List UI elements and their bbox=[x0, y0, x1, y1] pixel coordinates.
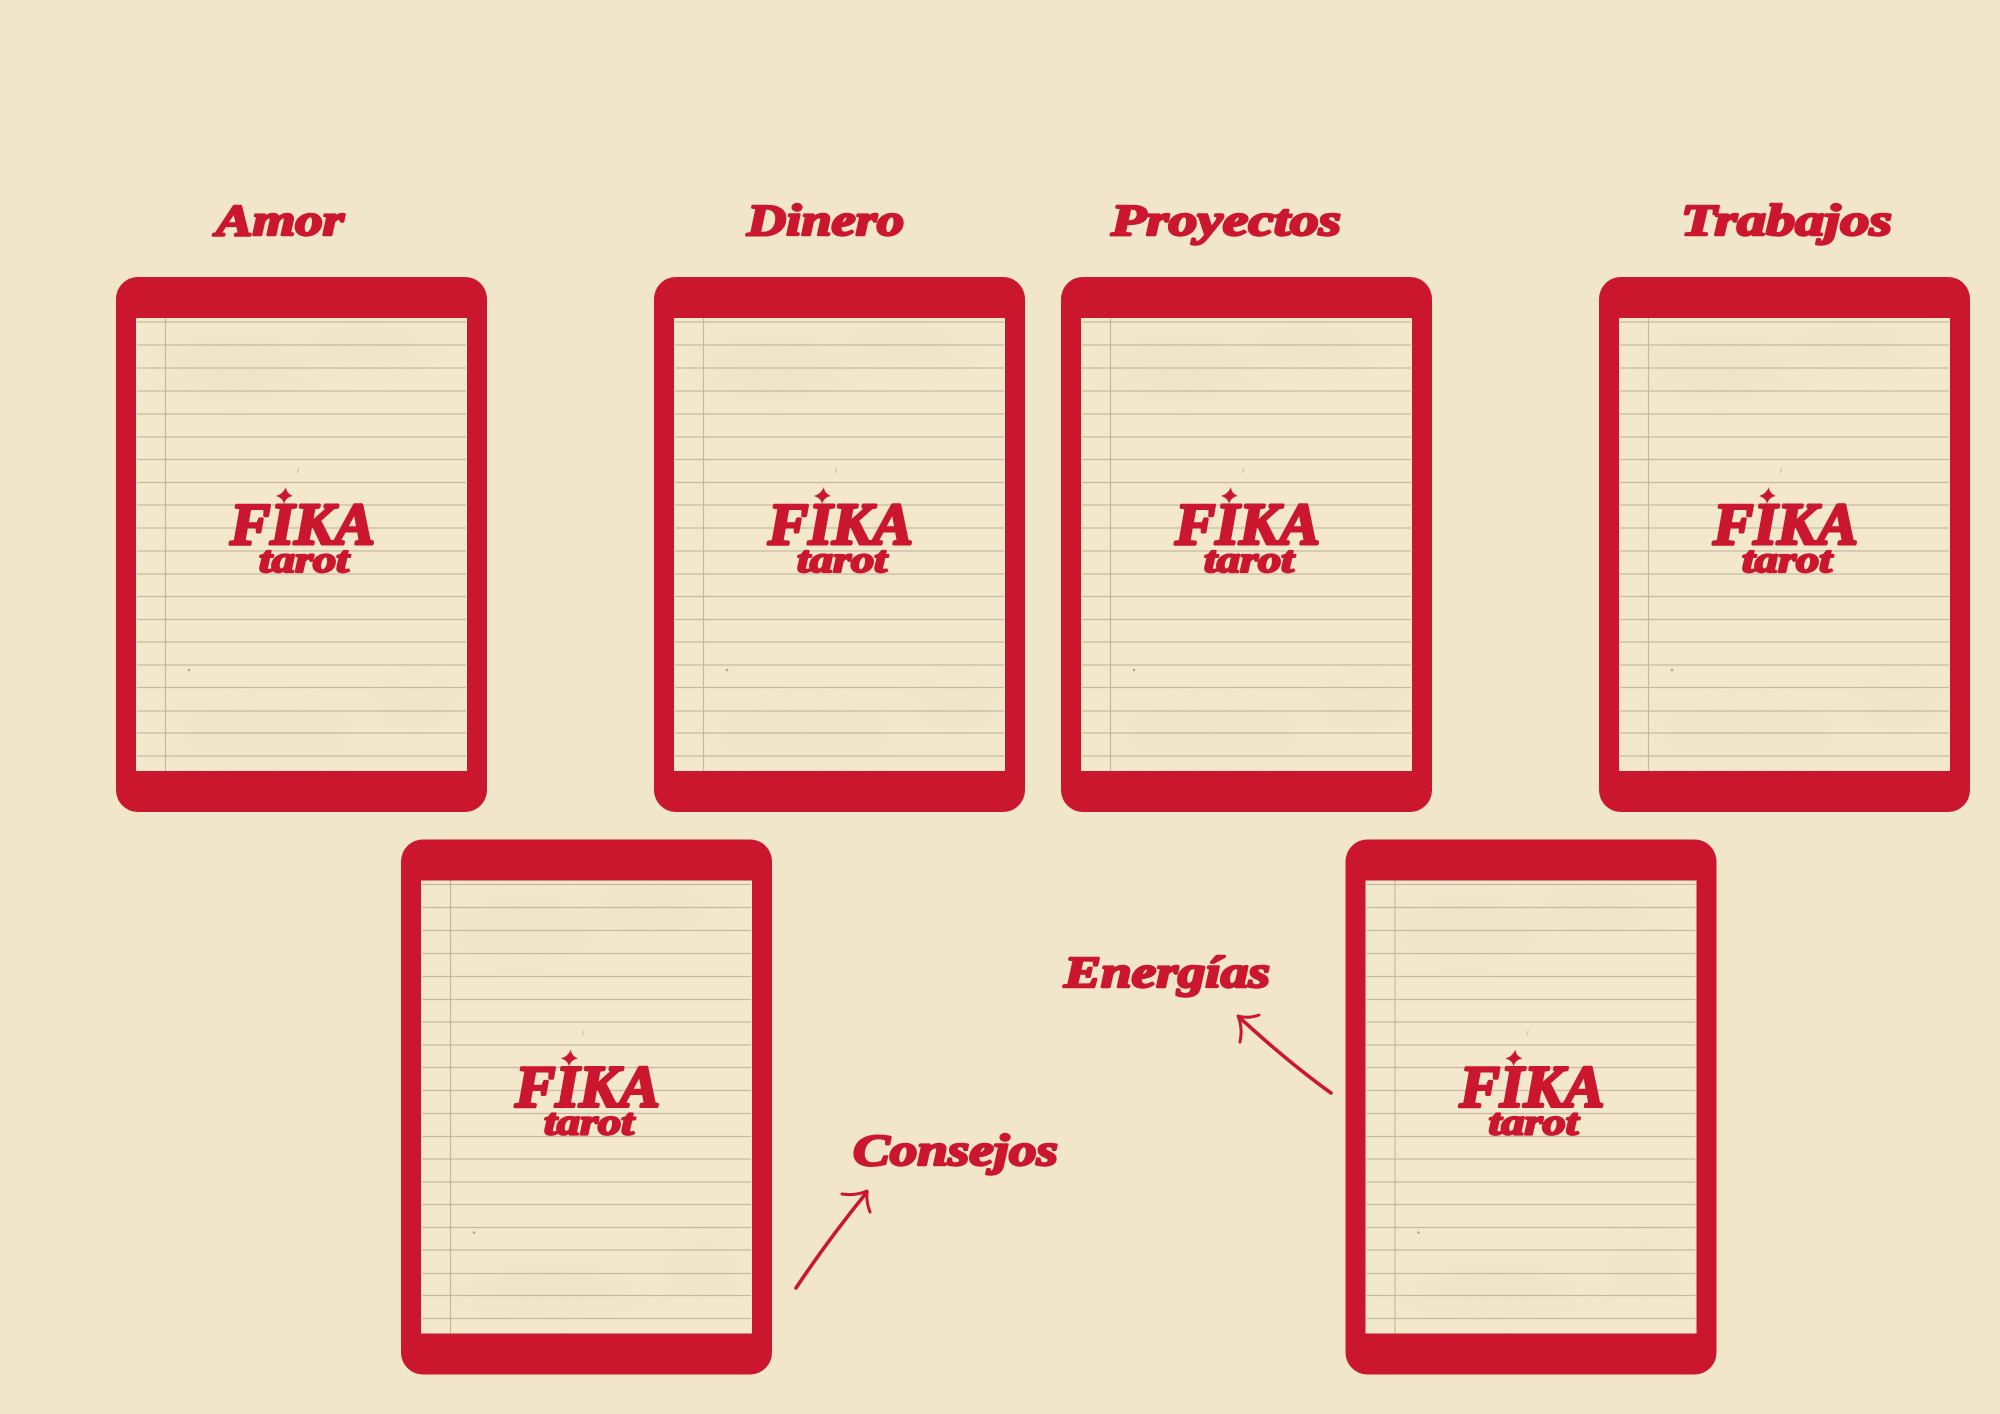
card: Trabajos bbox=[1599, 277, 1970, 812]
heading: Proyectos: Proyectos bbox=[1110, 196, 1341, 245]
heading: Energías: Energías bbox=[1063, 948, 1270, 997]
logo: Fika tarot: tarot bbox=[797, 540, 889, 581]
logo: Fika tarot: FIKA bbox=[514, 1054, 660, 1120]
logo: Fika tarot bbox=[1712, 487, 1858, 581]
card: Dinero bbox=[654, 277, 1025, 812]
logo: Fika tarot bbox=[1174, 487, 1320, 581]
logo: Fika tarot bbox=[229, 487, 375, 581]
logo: Fika tarot: FIKA bbox=[229, 491, 375, 557]
card: Proyectos bbox=[1061, 277, 1432, 812]
heading: Consejos: Consejos bbox=[853, 1126, 1058, 1175]
card: Energías bbox=[1346, 840, 1716, 1374]
heading: Amor: Amor bbox=[212, 196, 345, 245]
heading: Trabajos: Trabajos bbox=[1681, 196, 1892, 245]
arrow: to Consejos bbox=[796, 1191, 870, 1288]
logo: Fika tarot: FIKA bbox=[1458, 1054, 1604, 1120]
logo: Fika tarot bbox=[1458, 1050, 1604, 1144]
logo: Fika tarot: tarot bbox=[544, 1102, 636, 1144]
logo: Fika tarot: FIKA bbox=[1174, 491, 1320, 557]
logo: Fika tarot: FIKA bbox=[767, 491, 913, 557]
heading: Dinero: Dinero bbox=[746, 196, 904, 245]
card: Amor bbox=[116, 277, 487, 812]
logo: Fika tarot: FIKA bbox=[1712, 491, 1858, 557]
logo: Fika tarot: tarot bbox=[1742, 540, 1834, 581]
logo: Fika tarot: tarot bbox=[1488, 1102, 1581, 1144]
logo: Fika tarot bbox=[514, 1050, 660, 1144]
card: Consejos bbox=[401, 840, 772, 1374]
arrow: to Energías bbox=[1238, 1015, 1331, 1093]
logo: Fika tarot bbox=[767, 487, 913, 581]
logo: Fika tarot: tarot bbox=[1204, 540, 1296, 581]
logo: Fika tarot: tarot bbox=[259, 540, 351, 581]
